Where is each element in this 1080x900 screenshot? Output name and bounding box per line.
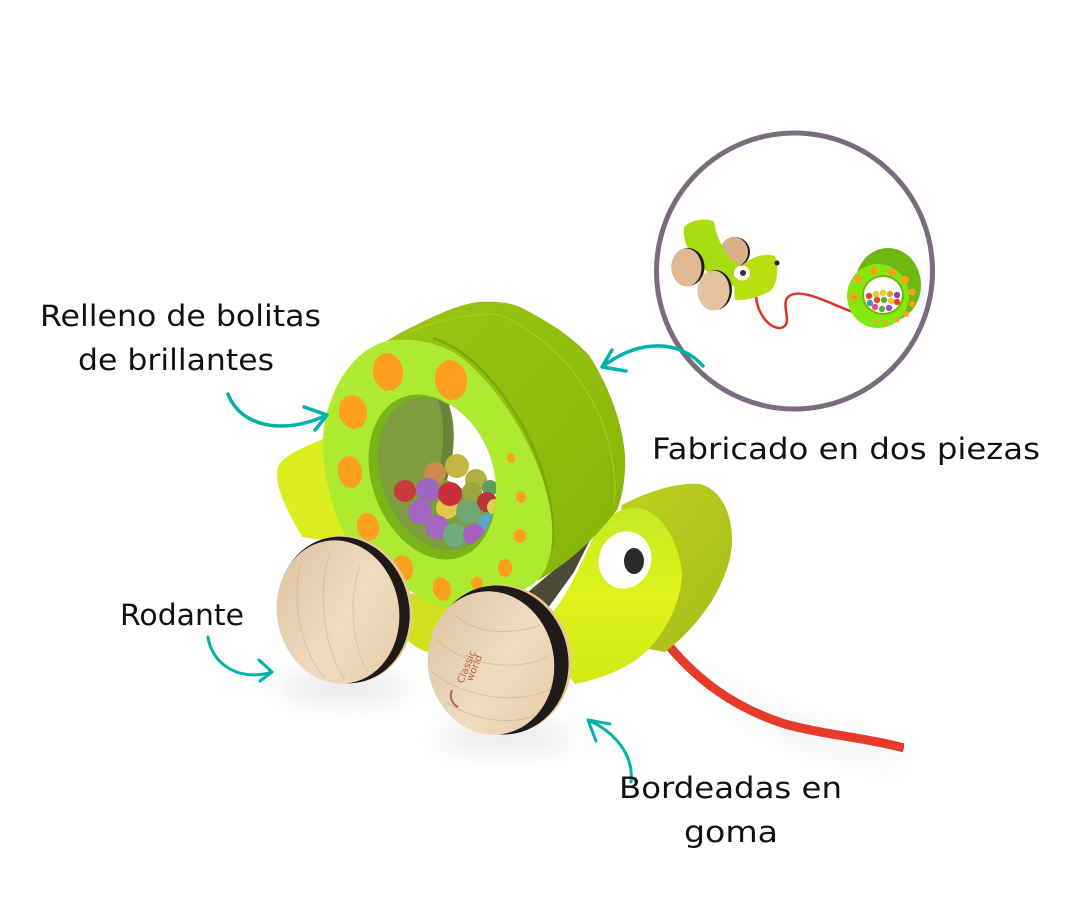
arrow: to shell filling xyxy=(228,394,327,430)
label: two pieces: Fabricado en dos piezas xyxy=(652,432,1040,466)
label: rolling: Rodante xyxy=(120,598,244,632)
label: filling: de brillantes xyxy=(78,343,274,377)
label: rubber edge: Bordeadas en xyxy=(619,771,842,805)
inset tail xyxy=(684,220,745,288)
wood grain xyxy=(297,552,368,680)
wheel brand mark: Classic xyxy=(456,649,479,685)
wood grain xyxy=(432,615,552,721)
left wheel xyxy=(261,520,430,699)
lower body between wheels xyxy=(390,590,450,652)
ground shadow xyxy=(277,665,904,770)
arrow: to rubber edge xyxy=(588,720,631,782)
label: filling: Relleno de bolitas xyxy=(40,299,321,333)
inset head xyxy=(733,255,780,300)
rattle beads xyxy=(394,454,503,547)
inset back wheel xyxy=(720,237,750,267)
inset beads xyxy=(866,290,900,312)
inset front wheel xyxy=(698,270,732,310)
shell front face with dots and window xyxy=(323,340,552,608)
shell drum xyxy=(385,302,625,586)
drum seams xyxy=(408,314,615,550)
label: rubber edge: goma xyxy=(684,815,778,849)
window interior xyxy=(378,398,496,551)
tail xyxy=(277,436,360,545)
orange dots xyxy=(335,351,526,603)
wheel brand mark xyxy=(451,649,485,707)
inset circle: two-piece view xyxy=(656,133,932,409)
inset shell xyxy=(847,248,921,328)
head and neck, side face xyxy=(600,484,732,652)
inset left wheel xyxy=(672,248,704,286)
wheel brand mark: world xyxy=(465,653,485,683)
label: rubber edge xyxy=(619,771,842,849)
main product: turtle pull toy xyxy=(261,302,904,770)
arrow: to rolling wheel xyxy=(208,637,272,681)
axle xyxy=(528,540,590,608)
label: filling xyxy=(40,299,321,377)
arrow: to two-piece shell xyxy=(602,346,703,371)
head and neck, front face xyxy=(540,508,682,684)
inset rope xyxy=(756,294,853,328)
eye xyxy=(591,524,659,596)
front wheel xyxy=(414,568,589,751)
red pull rope xyxy=(662,637,904,748)
window lip xyxy=(347,377,517,577)
